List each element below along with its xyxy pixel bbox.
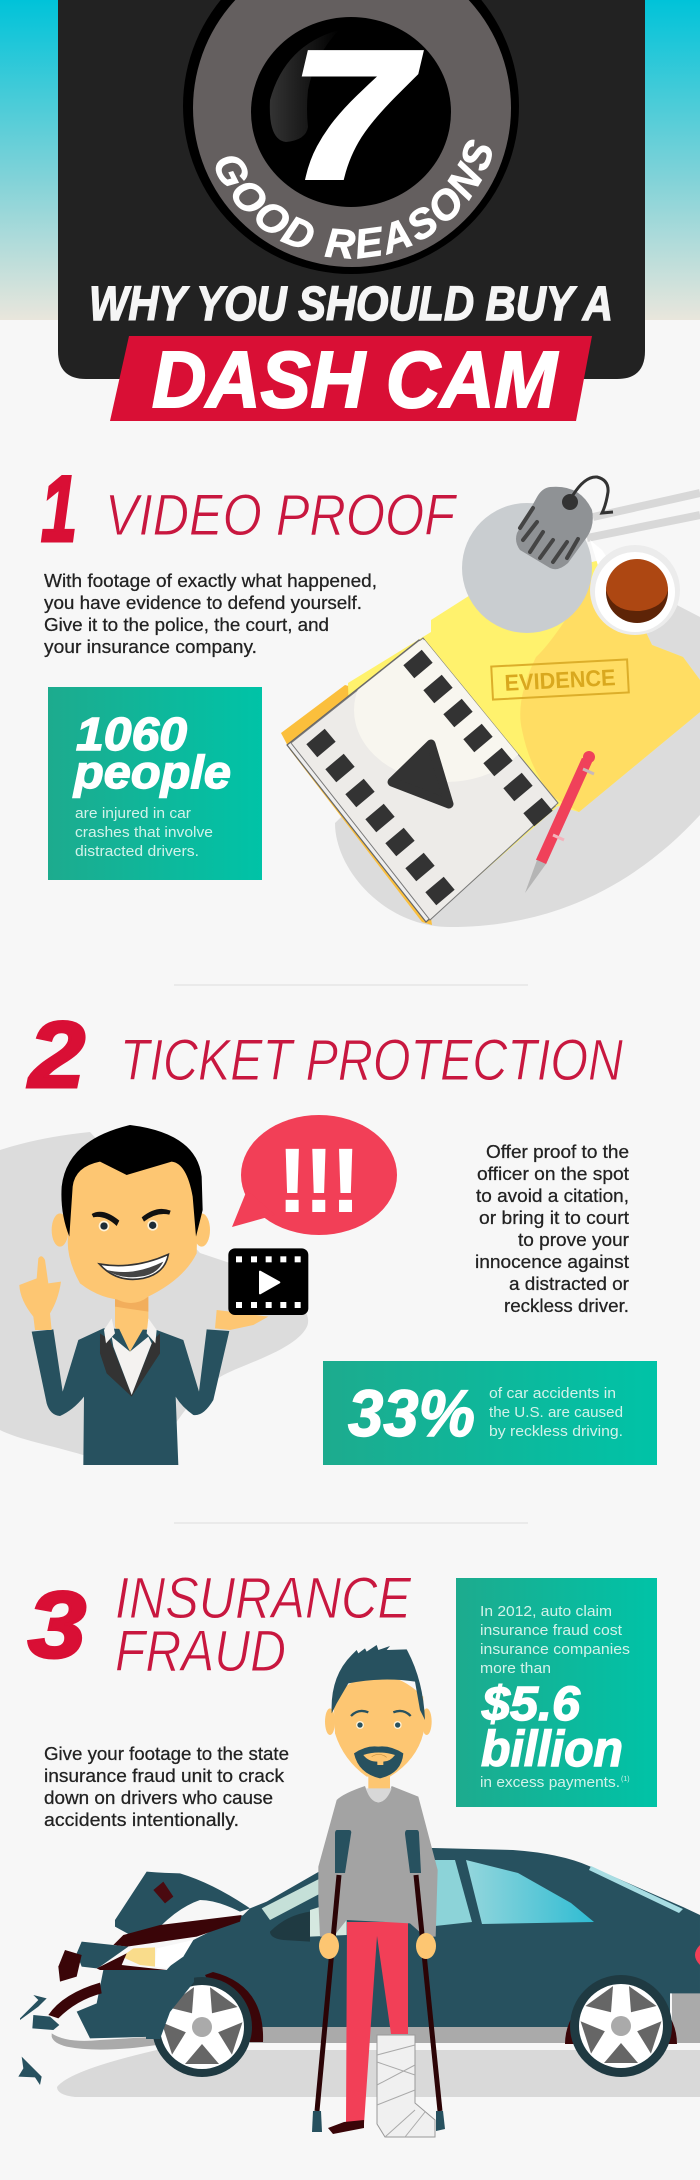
stat panel: $5.6 billion: more than	[480, 1660, 551, 1677]
section 2 body text: a distracted or	[509, 1274, 629, 1294]
section 3 heading: INSURANCE	[115, 1566, 412, 1631]
section 2 body text: innocence against	[475, 1252, 629, 1272]
car sill and bumper	[250, 2027, 700, 2043]
lamp	[462, 477, 613, 633]
stat panel: 33%	[323, 1361, 657, 1465]
divider	[174, 984, 528, 986]
folder	[281, 560, 700, 925]
section 2 body text: officer on the spot	[477, 1164, 629, 1184]
icon: video clip	[228, 1248, 308, 1315]
stat panel: 1060 people: are injured in car	[75, 805, 191, 822]
section 1 body text: With footage of exactly what happened,	[44, 571, 377, 591]
section 1 body text: Give it to the police, the court, and	[44, 615, 329, 635]
stat panel: $5.6 billion: insurance fraud cost	[480, 1622, 623, 1639]
stat panel: $5.6 billion: in excess payments.	[480, 1774, 620, 1791]
stat panel: 1060 people	[48, 687, 262, 880]
section 1 body text: your insurance company.	[44, 637, 257, 657]
trousers	[346, 1922, 408, 2124]
stat panel: 1060 people: crashes that involve	[75, 824, 213, 841]
stat panel: $5.6 billion: In 2012, auto claim	[480, 1603, 612, 1620]
film sheet	[287, 638, 558, 922]
windows	[262, 1872, 333, 1920]
section 1 heading: VIDEO PROOF	[105, 483, 458, 548]
pen	[525, 751, 595, 893]
section 3 body text: insurance fraud unit to crack	[44, 1766, 285, 1786]
section 2 body text: to prove your	[518, 1230, 629, 1250]
hands	[319, 1933, 436, 1959]
illustration: evidence folder with lamp, cup and pen	[281, 477, 700, 927]
crutches	[312, 1830, 445, 2132]
header: sky background	[0, 0, 700, 320]
car body	[77, 1848, 700, 2038]
stat panel: $5.6 billion: $5.6	[481, 1678, 580, 1731]
stat panel: $5.6 billion: insurance companies	[480, 1641, 630, 1658]
sweater	[318, 1786, 438, 1937]
front wheel	[146, 1972, 263, 2077]
illustration: injured man on crutches	[312, 1645, 445, 2137]
stat panel: 33%: by reckless driving.	[489, 1423, 623, 1440]
divider	[174, 1522, 528, 1524]
jacket	[32, 1328, 229, 1465]
stat panel: $5.6 billion: billion	[481, 1721, 623, 1777]
speech bubble	[232, 1115, 397, 1235]
grey blob behind man	[0, 1132, 308, 1455]
speech bubble: !!!	[277, 1130, 361, 1232]
title banner: dash cam: DASH CAM	[152, 335, 559, 424]
section 3 heading	[115, 1566, 412, 1684]
section 2 body text: to avoid a citation,	[476, 1186, 629, 1206]
title: why you should buy a: WHY YOU SHOULD BUY A	[89, 278, 613, 331]
section 2 number: 2	[27, 1002, 85, 1107]
section 2 body text	[475, 1142, 629, 1316]
section 2 body text: Offer proof to the	[486, 1142, 629, 1162]
section 3 number: 3	[28, 1572, 86, 1677]
icon: camera lens	[183, 0, 519, 274]
section 3 body text: accidents intentionally.	[44, 1810, 239, 1830]
ground shadow	[57, 2050, 700, 2097]
illustration: crashed car	[18, 1848, 700, 2085]
stat panel: 33%: of car accidents in	[489, 1385, 616, 1402]
section 1 body text: you have evidence to defend yourself.	[44, 593, 362, 613]
section 2 body text: reckless driver.	[504, 1296, 629, 1316]
header: dark panel	[58, 0, 645, 379]
section 3 body text: Give your footage to the state	[44, 1744, 289, 1764]
section 2 body text: or bring it to court	[479, 1208, 629, 1228]
stat panel: 33%: 33%	[348, 1376, 475, 1450]
section 1 number: 1	[41, 456, 77, 561]
evidence stamp: EVIDENCE	[504, 664, 616, 696]
stat panel: 1060 people: distracted drivers.	[75, 843, 199, 860]
section 1 body text	[44, 571, 377, 657]
shoe	[328, 2120, 364, 2134]
stat panel: 1060 people: 1060	[76, 708, 187, 760]
title: good reasons on curve: GOOD REASONS	[216, 140, 492, 259]
section 3 body text: down on drivers who cause	[44, 1788, 273, 1808]
illustration: man with video	[19, 1125, 268, 1465]
rear wheel	[565, 1975, 677, 2077]
evidence stamp	[491, 659, 629, 700]
section 3 body text	[44, 1744, 289, 1830]
stat panel: 33%: the U.S. are caused	[489, 1404, 623, 1421]
leg cast	[377, 2035, 435, 2137]
coffee cup	[590, 540, 680, 635]
stat panel: 1060 people: people	[72, 746, 231, 798]
section 3 heading: FRAUD	[115, 1619, 286, 1684]
stat panel: $5.6 billion	[456, 1578, 657, 1807]
stat panel: $5.6 billion: (1)	[621, 1776, 630, 1783]
lamp arms	[587, 493, 700, 538]
title: big seven: 7	[291, 15, 420, 216]
